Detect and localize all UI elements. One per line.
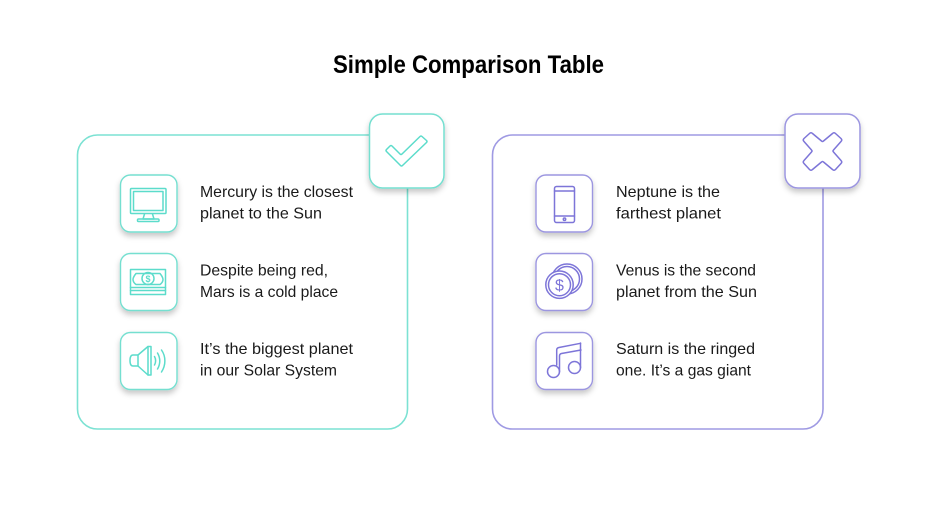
text: monitor row: Mercury is the closest [200, 184, 354, 201]
text: speaker row: in our Solar System [200, 362, 337, 380]
text: phone row: Neptune is the [616, 184, 720, 201]
text: monitor row: planet to the Sun [200, 206, 322, 222]
row: coins [536, 254, 757, 310]
text: coins row: planet from the Sun [616, 284, 757, 301]
row: speaker [120, 332, 354, 390]
text: speaker row: It’s the biggest planet [200, 341, 354, 358]
row: phone [536, 175, 722, 232]
text: coins row: Venus is the second [616, 262, 756, 280]
panel outline: positive [78, 135, 408, 429]
icon: speaker [120, 332, 177, 390]
badge: cross mark [785, 114, 860, 188]
icon: banknotes [120, 254, 177, 310]
text: banknotes row: Mars is a cold place [200, 284, 338, 301]
row: music [536, 332, 755, 390]
text: music row: Saturn is the ringed [616, 341, 755, 358]
row: banknotes [120, 254, 338, 310]
icon: banknotes: $ [145, 274, 151, 284]
badge: check mark [370, 114, 444, 188]
row: monitor [120, 175, 354, 232]
icon: music note [536, 332, 592, 390]
title: Simple Comparison Table [333, 51, 604, 79]
text: music row: one. It’s a gas giant [616, 362, 752, 380]
icon: monitor [120, 175, 177, 232]
panel outline: negative [492, 135, 823, 429]
panel: negative comparison [492, 114, 860, 429]
icon: phone [536, 175, 592, 232]
panel: positive comparison [78, 114, 444, 429]
icon: coins [536, 254, 592, 310]
text: phone row: farthest planet [616, 206, 722, 222]
icon: coins: $ [555, 278, 564, 294]
text: banknotes row: Despite being red, [200, 262, 328, 280]
